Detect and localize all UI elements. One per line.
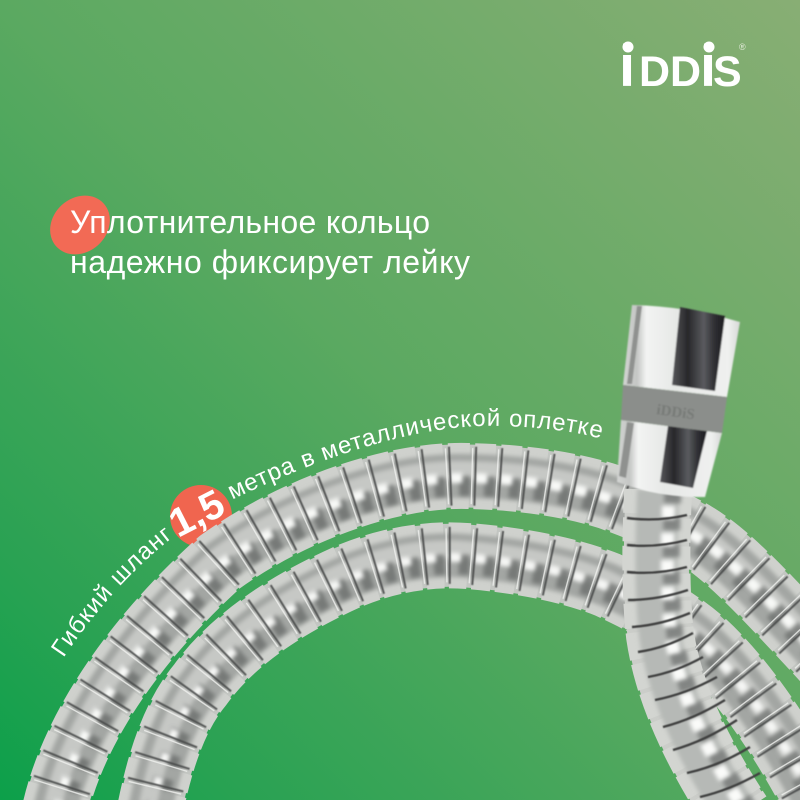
hose: upper coil	[53, 470, 800, 800]
hose: lower coil	[148, 549, 800, 800]
connector: chrome fitting	[617, 305, 740, 497]
value: 1,5: 1,5	[162, 482, 232, 546]
caption: curved text: Гибкий шланг	[50, 528, 170, 656]
badge: heading accent	[38, 184, 122, 266]
logo: iddis: S	[713, 48, 742, 96]
caption: curved text	[50, 408, 602, 656]
heading: надежно фиксирует лейку	[70, 244, 470, 280]
heading	[70, 204, 470, 280]
connector: grey rubber ring	[621, 385, 727, 433]
logo: iddis	[619, 34, 746, 99]
hose: front section below connector	[627, 490, 760, 800]
heading: Уплотнительное кольцо	[70, 204, 430, 240]
logo: iddis: D	[670, 48, 701, 96]
connector: lower chrome body	[617, 420, 722, 497]
hose: tilted ribs	[627, 515, 760, 797]
logo: iddis: D	[639, 48, 670, 96]
logo: iddis: ®	[739, 42, 746, 52]
logo: iddis: i	[619, 34, 635, 99]
logo: iddis: i	[700, 34, 716, 99]
badge: 1,5 accent	[170, 485, 232, 547]
caption: curved text: метра в металлической оплетке	[228, 408, 602, 499]
connector: upper chrome body	[623, 305, 740, 397]
connector: embossed logo: iDDiS	[655, 402, 696, 423]
